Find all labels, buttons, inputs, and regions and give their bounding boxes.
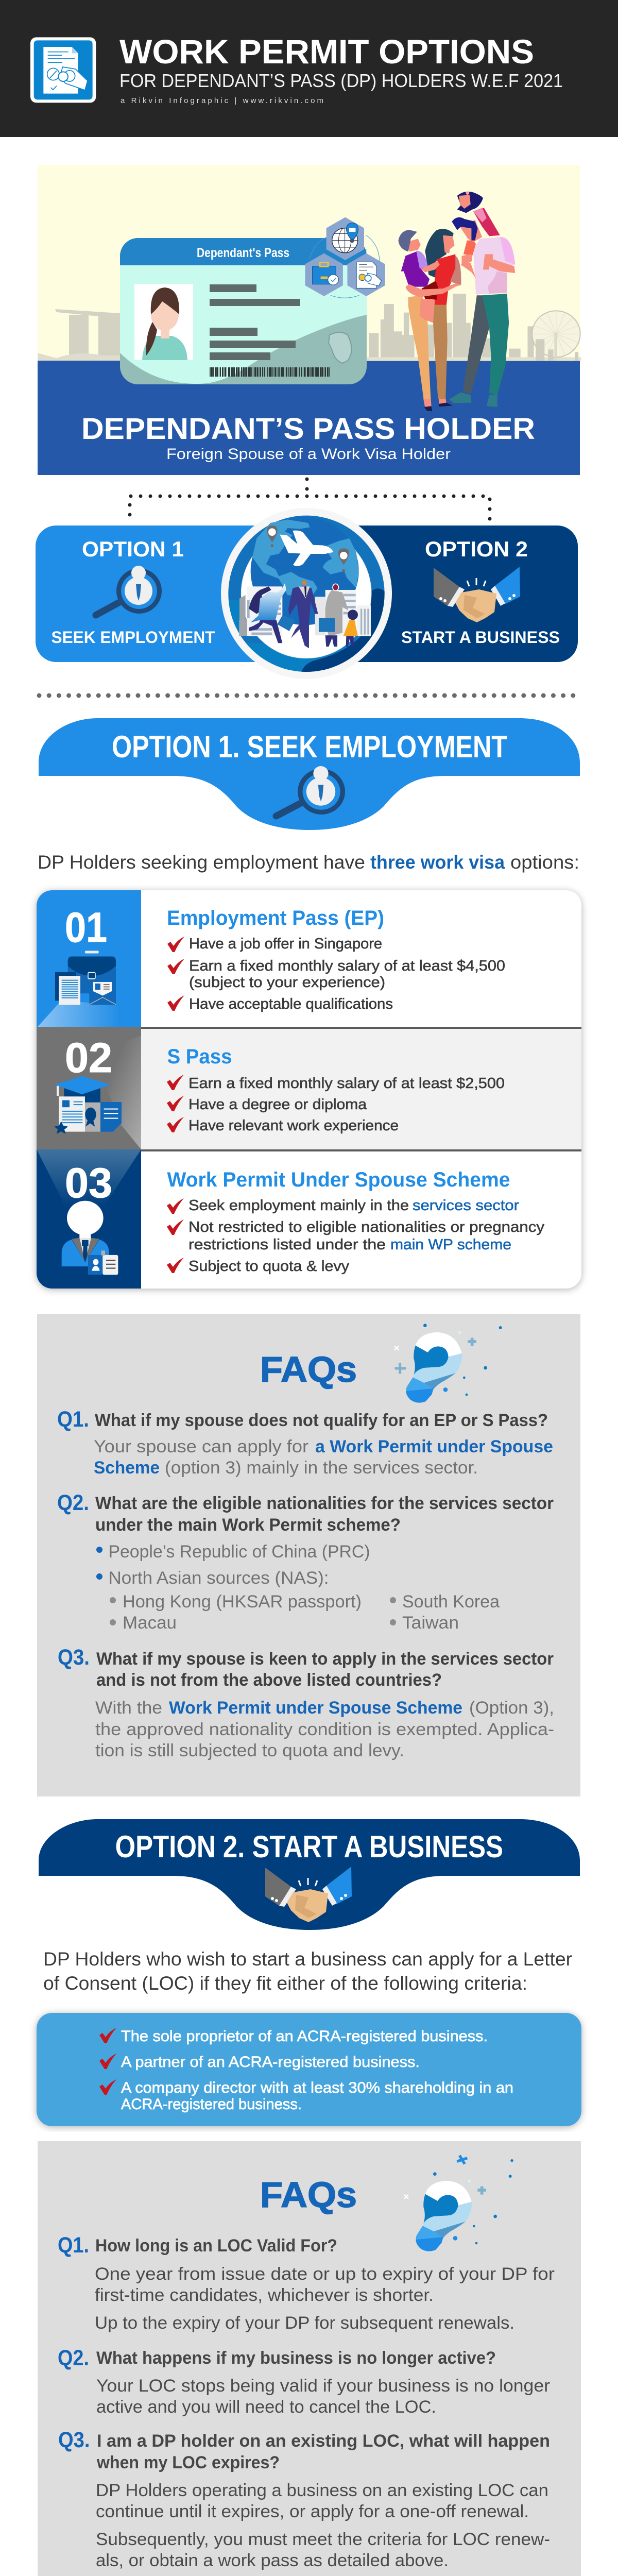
boy in mother's arms xyxy=(398,230,461,323)
row 1: employment pass: Employment Pass (EP) xyxy=(167,907,384,929)
buildings xyxy=(239,586,371,636)
panel: LOC criteria: ACRA-registered business. xyxy=(121,2096,302,2113)
option 2 block: OPTION 2 xyxy=(425,537,528,561)
title: WORK PERMIT OPTIONS xyxy=(119,32,534,71)
subtitle: FOR DEPENDANT’S PASS (DP) HOLDERS W.E.F 2021 xyxy=(119,70,563,91)
icon: permit document with hand and coins xyxy=(30,37,96,103)
row 2: S pass: Have a degree or diploma xyxy=(188,1096,367,1113)
question 1: One year from issue date or up to expiry of your DP for xyxy=(95,2264,555,2284)
FAQs heading: FAQs xyxy=(260,1349,357,1389)
illustration: family xyxy=(398,191,515,411)
hero subtitle: Foreign Spouse of a Work Visa Holder xyxy=(166,446,451,463)
father's torso xyxy=(473,237,515,295)
question 3 xyxy=(58,2428,550,2570)
photo xyxy=(134,284,193,360)
plane xyxy=(280,531,334,566)
question 2: Q2. xyxy=(58,2346,89,2370)
icon: question mark light bulb xyxy=(394,1324,502,1403)
merlion watermark xyxy=(329,332,351,363)
question 3: Work Permit under Spouse Scheme xyxy=(169,1698,462,1718)
row 3: work permit under spouse scheme xyxy=(167,1168,545,1275)
question 1: Your spouse can apply for xyxy=(94,1437,308,1456)
question 1: first-time candidates, whichever is shorter. xyxy=(95,2285,434,2305)
question 3: Subsequently, you must meet the criteria for LOC renew- xyxy=(96,2530,550,2549)
panel: option bar xyxy=(36,508,578,684)
number 01: 01 xyxy=(65,904,107,951)
question 3: With the xyxy=(95,1698,162,1718)
option 1 block: OPTION 1 xyxy=(82,537,184,561)
banner: option 1 seek employment: OPTION 1. SEEK EMPLOYMENT xyxy=(112,730,507,764)
intro text: three work visa options xyxy=(38,852,579,873)
byline: a Rikvin Infographic | www.rikvin.com xyxy=(121,96,323,105)
girl on shoulders xyxy=(457,191,500,278)
panel: hero dependant's pass xyxy=(38,165,581,475)
panel: LOC criteria: The sole proprietor of an ACRA-registered business. xyxy=(121,2028,488,2045)
question 2: Q2. xyxy=(57,1490,89,1515)
father's legs and shoes xyxy=(449,294,509,407)
illustration: Marina Bay Sands skyline xyxy=(38,309,120,361)
map pins xyxy=(267,526,349,572)
number 03: 03 xyxy=(65,1160,112,1207)
question 3: continue until it expires, or apply for a one-off renewal. xyxy=(96,2502,529,2521)
question 2: What are the eligible nationalities for the services sector xyxy=(95,1494,554,1513)
row 2: S pass: S Pass xyxy=(167,1045,232,1068)
question 3: als, or obtain a work pass as detailed above. xyxy=(96,2551,449,2570)
option 1 block xyxy=(36,526,306,662)
row 3: work permit under spouse scheme: services sector xyxy=(413,1197,519,1214)
question 2 xyxy=(57,1490,554,1633)
illustration: globe with travellers xyxy=(221,508,392,684)
panel: FAQs for starting a business xyxy=(38,2141,581,2576)
row 1: employment pass: Have a job offer in Singapore xyxy=(189,936,382,952)
barcode xyxy=(210,367,330,377)
travellers xyxy=(249,580,358,648)
question 2: People’s Republic of China (PRC) xyxy=(108,1542,370,1562)
father's head xyxy=(452,217,482,242)
icon: question mark light bulb xyxy=(404,2156,513,2251)
question 3: I am a DP holder on an existing LOC, what will happen xyxy=(97,2431,550,2451)
row 1: employment pass xyxy=(167,907,505,1012)
dotted divider xyxy=(39,693,578,698)
intro text: three work visa options: three work visa xyxy=(370,852,505,873)
question 2: Taiwan xyxy=(402,1613,459,1633)
question 2: Macau xyxy=(123,1613,177,1633)
question 1: (option 3) mainly in the services sector. xyxy=(165,1458,478,1478)
question 2: What happens if my business is no longer active? xyxy=(96,2348,496,2368)
question 1 xyxy=(57,1407,553,1478)
FAQs heading: FAQs xyxy=(260,2175,357,2215)
header band xyxy=(0,0,618,137)
question 1: Up to the expiry of your DP for subsequent renewals. xyxy=(95,2313,514,2333)
question 3: and is not from the above listed countries? xyxy=(96,1670,442,1690)
intro text: letter of consent: DP Holders who wish to start a business can apply for a Letter xyxy=(43,1948,572,1970)
mother's legs xyxy=(408,295,453,411)
option 1 block: SEEK EMPLOYMENT xyxy=(52,628,215,647)
question 1: How long is an LOC Valid For? xyxy=(95,2236,337,2256)
row 2: S pass: Earn a fixed monthly salary of at least $2,500 xyxy=(188,1075,505,1092)
row 3: work permit under spouse scheme: restrictions listed under the xyxy=(188,1236,386,1253)
row 1: employment pass: Earn a fixed monthly salary of at least $4,500 xyxy=(189,958,505,974)
question 2: Hong Kong (HKSAR passport) xyxy=(123,1592,362,1612)
row 3: work permit under spouse scheme: main WP scheme xyxy=(390,1236,511,1253)
illustration: city skyline and Ferris wheel xyxy=(367,294,581,361)
intro text: letter of consent xyxy=(43,1948,572,1994)
panel: LOC criteria: A partner of an ACRA-registered business. xyxy=(121,2054,420,2071)
data bars xyxy=(210,284,300,360)
question 3 xyxy=(58,1645,554,1760)
question 1: What if my spouse does not qualify for an EP or S Pass? xyxy=(95,1411,548,1430)
panel: visa options table xyxy=(37,890,581,1289)
mother's torso and head xyxy=(425,229,461,305)
icon: employee with ID card xyxy=(62,1201,118,1275)
icon: briefcase and documents xyxy=(55,951,116,1005)
banner: option 1 seek employment xyxy=(39,718,580,830)
panel: FAQs for seeking employment xyxy=(37,1314,580,1797)
row 3: work permit under spouse scheme: Not restricted to eligible nationalities or pregnancy xyxy=(188,1219,545,1235)
question 3: Q3. xyxy=(58,2428,90,2452)
question 2 xyxy=(58,2346,550,2417)
icon: magnifier with employee xyxy=(276,766,345,816)
intro text: three work visa options: options: xyxy=(510,852,579,873)
question 2: active and you will need to cancel the LOC. xyxy=(96,2397,436,2417)
row 3: work permit under spouse scheme: Work Permit Under Spouse Scheme xyxy=(167,1168,510,1191)
row 2: S pass: Have relevant work experience xyxy=(188,1117,399,1134)
panel: LOC criteria xyxy=(37,2013,581,2126)
icon: handshake xyxy=(265,1867,352,1922)
question 3: the approved nationality condition is exempted. Applica- xyxy=(95,1720,554,1739)
option 2 block: START A BUSINESS xyxy=(401,628,560,647)
question 3: tion is still subjected to quota and levy. xyxy=(95,1741,404,1760)
illustration: dependant's pass card xyxy=(120,238,367,384)
question 2: North Asian sources (NAS): xyxy=(108,1568,329,1588)
question 1: Q1. xyxy=(58,2233,89,2258)
question 1: Q1. xyxy=(57,1407,89,1432)
row 1: employment pass: Have acceptable qualifications xyxy=(189,996,393,1012)
intro text: letter of consent: of Consent (LOC) if they fit either of the following criteria: xyxy=(43,1973,527,1994)
illustration: dependant's pass card: Dependant's Pass xyxy=(197,246,289,260)
hero title: DEPENDANT’S PASS HOLDER xyxy=(81,412,535,446)
icons: three hexagons xyxy=(305,217,385,298)
question 3: What if my spouse is keen to apply in the services sector xyxy=(96,1649,554,1669)
dotted connector to options xyxy=(130,479,490,523)
panel: LOC criteria: A company director with at least 30% shareholding in an xyxy=(121,2079,513,2096)
row 1: employment pass: (subject to your experience) xyxy=(189,974,385,991)
row 3: work permit under spouse scheme: Subject to quota & levy xyxy=(188,1258,350,1275)
question 2: South Korea xyxy=(402,1592,500,1612)
option 2 block xyxy=(306,526,578,662)
row 2: S pass xyxy=(167,1045,505,1134)
question 1: a Work Permit under Spouse xyxy=(315,1437,553,1456)
question 3: (Option 3), xyxy=(469,1698,554,1718)
icon: graduation cap and certificates xyxy=(54,1076,122,1134)
question 2: Your LOC stops being valid if your business is no longer xyxy=(96,2376,550,2396)
banner: option 2 start a business: OPTION 2. START A BUSINESS xyxy=(115,1829,503,1864)
question 3: when my LOC expires? xyxy=(96,2453,280,2472)
question 3: Q3. xyxy=(58,1645,90,1670)
question 1: Scheme xyxy=(94,1458,160,1478)
question 3: DP Holders operating a business on an existing LOC can xyxy=(96,2481,548,2500)
row 3: work permit under spouse scheme: Seek employment mainly in the xyxy=(188,1197,409,1214)
question 1 xyxy=(58,2233,555,2333)
number 02: 02 xyxy=(65,1035,112,1081)
banner: option 2 start a business xyxy=(39,1819,580,1930)
intro text: three work visa options: DP Holders seeking employment have xyxy=(38,852,365,873)
question 2: under the main Work Permit scheme? xyxy=(95,1515,401,1535)
